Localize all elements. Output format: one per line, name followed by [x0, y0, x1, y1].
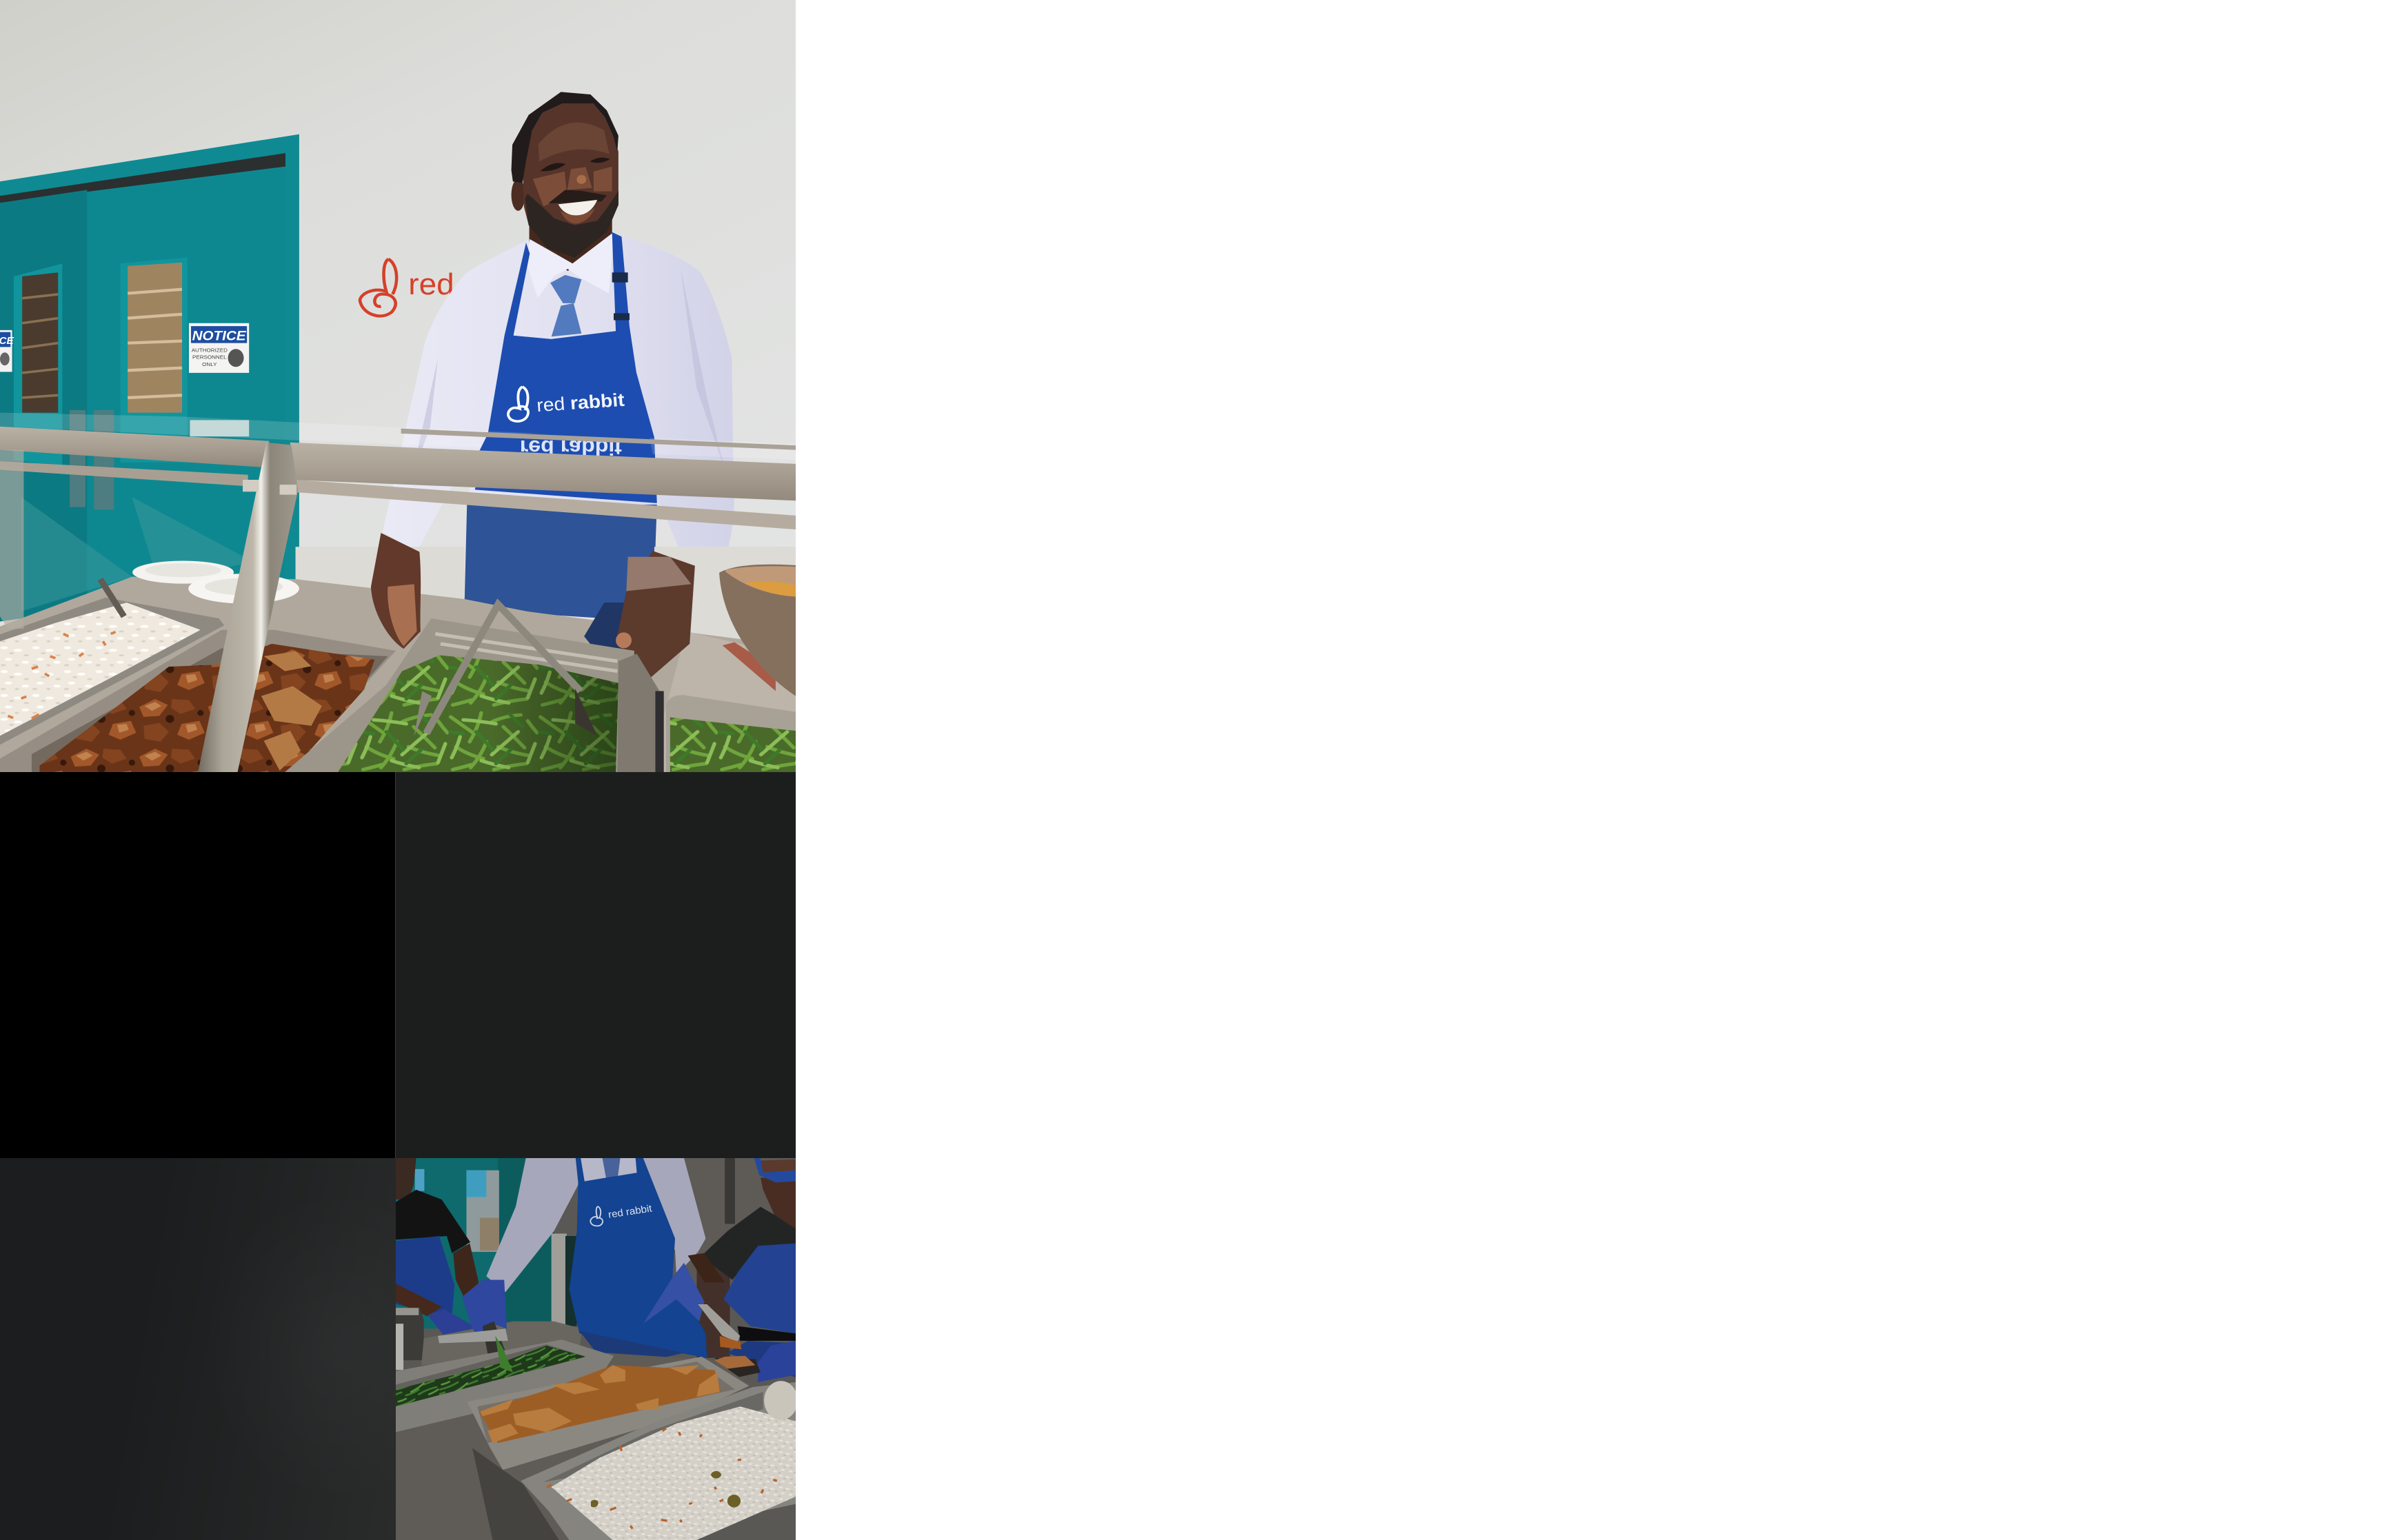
smile — [559, 200, 597, 216]
counter right side — [649, 631, 796, 772]
top photo: smiling man in blue apron at a food serving line — [0, 0, 796, 772]
sign: NOTICE authorized personnel only: ONLY — [202, 361, 217, 367]
apron strap buckle — [612, 272, 630, 320]
white package under glove — [438, 1328, 508, 1344]
glove with tongs — [462, 1280, 507, 1338]
dark reflection behind hand — [584, 602, 649, 664]
sign: NOTICE authorized personnel only — [189, 323, 249, 373]
steel cabinet — [684, 1158, 796, 1358]
serving counter — [0, 577, 796, 772]
rice tray — [521, 1381, 798, 1540]
blue counter — [579, 1331, 684, 1370]
sign: partial left notice — [0, 330, 14, 372]
kitchen background — [396, 1158, 796, 1540]
tray side and dark divider — [617, 654, 660, 772]
dark panel: charcoal gradient — [0, 1158, 396, 1540]
apron lower behind glass — [464, 505, 657, 621]
tie — [550, 275, 581, 336]
sneeze guard upright post — [198, 443, 298, 773]
sneeze guard glass top — [0, 413, 796, 460]
reflected notice on glass — [190, 420, 249, 436]
wooden bowl — [719, 565, 796, 696]
teal wall and door window — [396, 1158, 577, 1328]
rice tray — [0, 579, 224, 744]
lower lip — [561, 207, 595, 224]
green bean tray with tongs — [285, 605, 637, 773]
sneeze guard stainless bars — [0, 427, 796, 629]
apron logo: red rabbit — [590, 1204, 653, 1226]
sign: NOTICE authorized personnel only: AUTHORIZED — [192, 347, 228, 354]
beard — [525, 191, 619, 258]
face — [523, 103, 619, 258]
chicken pieces — [480, 1365, 720, 1443]
stacked containers — [396, 1308, 424, 1370]
eyes — [541, 158, 610, 171]
main stainless counter — [396, 1353, 750, 1540]
sign: NOTICE authorized personnel only: PERSONNEL — [192, 354, 227, 361]
apron logo: red rabbit — [508, 387, 625, 421]
teal double door — [0, 134, 299, 621]
neck and ear — [530, 214, 612, 271]
reflected apron logo on glass — [475, 434, 654, 463]
wall logo: red rabbit — [360, 259, 454, 316]
hair — [512, 92, 619, 183]
bean tray — [396, 1336, 614, 1432]
red towel on counter — [723, 642, 776, 691]
apron bib and straps — [475, 231, 657, 503]
ear — [512, 179, 525, 211]
wall logo: red rabbit: red — [408, 268, 454, 301]
man: head and torso — [383, 92, 734, 621]
paper plates — [132, 560, 299, 604]
dark panel: black — [0, 772, 395, 1158]
sleeve fold shadows — [412, 268, 725, 477]
dark panel: charcoal — [395, 772, 796, 1158]
cheek and nose highlight — [533, 167, 612, 206]
apron logo: red rabbit: red rabbit — [607, 1204, 653, 1221]
counter shadow — [472, 1448, 559, 1540]
collar — [526, 232, 614, 298]
center man with apron — [462, 1158, 707, 1360]
right worker — [643, 1158, 796, 1382]
left worker — [396, 1158, 479, 1348]
chicken tray — [0, 630, 396, 773]
mustache — [548, 190, 607, 203]
sign: NOTICE authorized personnel only: NOTICE — [192, 329, 246, 343]
bottom photo: servers in blue aprons plating food — [396, 1158, 796, 1540]
hands — [371, 533, 695, 689]
apron logo: red rabbit: red rabbit — [536, 389, 625, 416]
forehead highlight — [539, 123, 610, 161]
shirt — [383, 231, 734, 579]
wall seen through lower glass — [296, 547, 796, 671]
chicken tray — [467, 1357, 749, 1470]
wall — [0, 0, 796, 772]
right green bean tray — [655, 691, 796, 772]
reflected apron logo on glass: red rabbit — [520, 436, 623, 459]
rear countertop — [421, 1321, 582, 1365]
